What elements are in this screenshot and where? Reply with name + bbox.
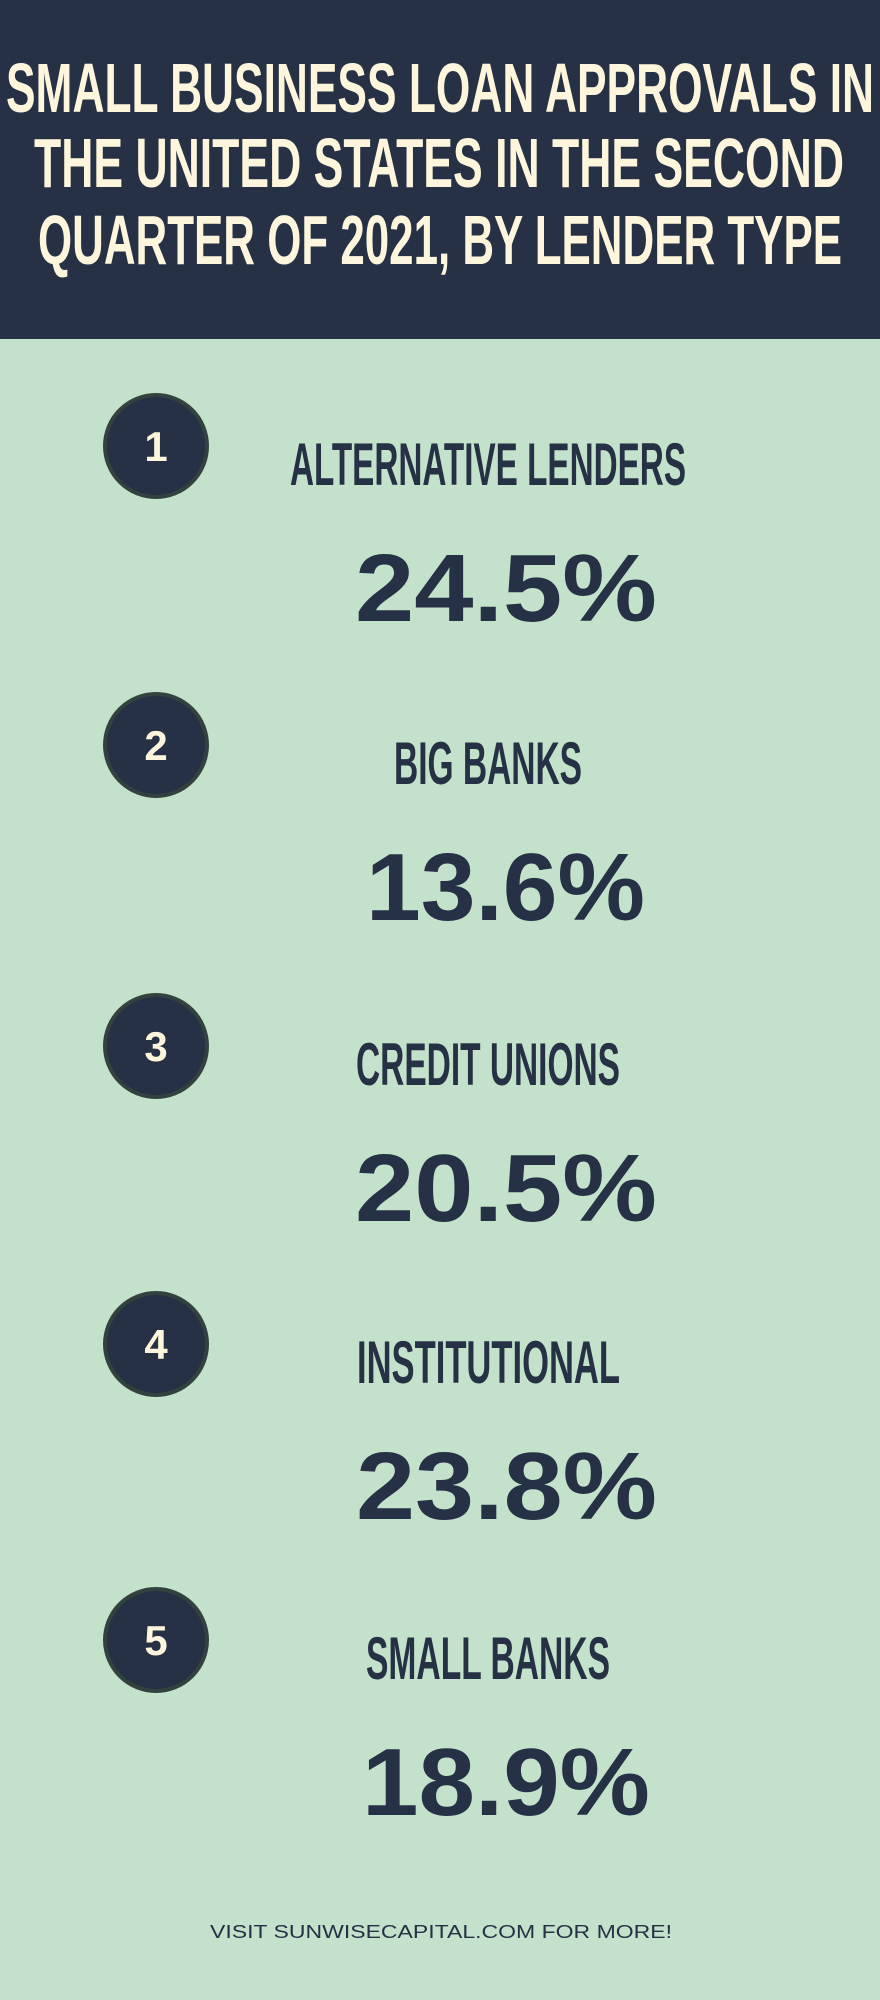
- icon: number circle 2: [105, 694, 207, 796]
- title: [6, 49, 874, 279]
- icon: number circle 3: [105, 995, 207, 1097]
- item 3: credit unions: [105, 995, 657, 1242]
- label: CREDIT UNIONS: [356, 1031, 620, 1098]
- label: SMALL BANKS: [366, 1625, 610, 1692]
- value: 24.5%: [355, 535, 657, 642]
- icon: number circle 1: 1: [144, 423, 168, 470]
- item 1: alternative lenders: [105, 395, 686, 642]
- value: 18.9%: [362, 1729, 650, 1836]
- footer: VISIT SUNWISECAPITAL.COM FOR MORE!: [210, 1922, 672, 1942]
- value: 13.6%: [366, 834, 645, 941]
- icon: number circle 5: [105, 1589, 207, 1691]
- icon: number circle 2: 2: [144, 722, 168, 769]
- icon: number circle 4: [105, 1293, 207, 1395]
- label: BIG BANKS: [394, 730, 582, 797]
- value: 23.8%: [356, 1433, 657, 1540]
- item 2: big banks: [105, 694, 645, 941]
- icon: number circle 1: [105, 395, 207, 497]
- icon: number circle 4: 4: [144, 1321, 168, 1368]
- value: 20.5%: [355, 1135, 657, 1242]
- item 5: small banks: [105, 1589, 650, 1836]
- item 4: institutional: [105, 1293, 657, 1540]
- icon: number circle 5: 5: [144, 1617, 168, 1664]
- icon: number circle 3: 3: [144, 1023, 168, 1070]
- header: [0, 0, 880, 339]
- label: INSTITUTIONAL: [357, 1329, 620, 1396]
